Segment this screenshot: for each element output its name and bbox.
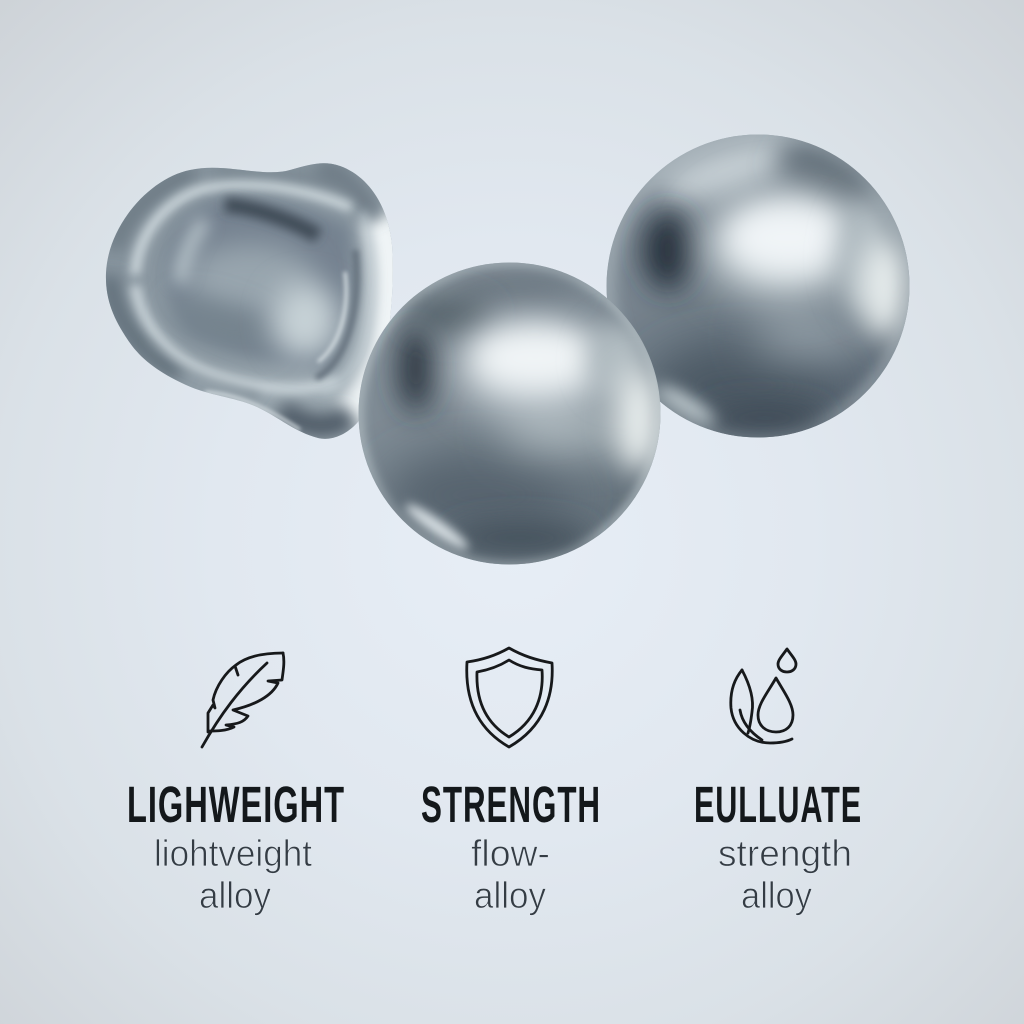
- description line: alloy: alloy: [199, 875, 271, 916]
- column: eulluate: [694, 776, 862, 916]
- column: strength: [421, 776, 601, 916]
- heading: eulluate: EULLUATE: [694, 776, 862, 833]
- metal sphere: right: [606, 126, 910, 438]
- icon: shield: [467, 648, 552, 747]
- heading: lighweight: LIGHWEIGHT: [127, 776, 345, 833]
- column: lightweight: [127, 776, 345, 916]
- description: strength: strength: [718, 833, 852, 874]
- icon: feather: [202, 653, 284, 747]
- icon: leaf and water drops: [731, 649, 796, 743]
- description line: alloy: alloy: [474, 875, 546, 916]
- description: flow: flow-: [471, 833, 550, 874]
- heading: strength: STRENGTH: [421, 776, 601, 833]
- description: lightweight: liohtveight: [154, 833, 313, 874]
- metal blob: flowing alloy shape: [106, 163, 393, 439]
- metal sphere: centre: [358, 262, 662, 564]
- description line: alloy: alloy: [741, 875, 812, 916]
